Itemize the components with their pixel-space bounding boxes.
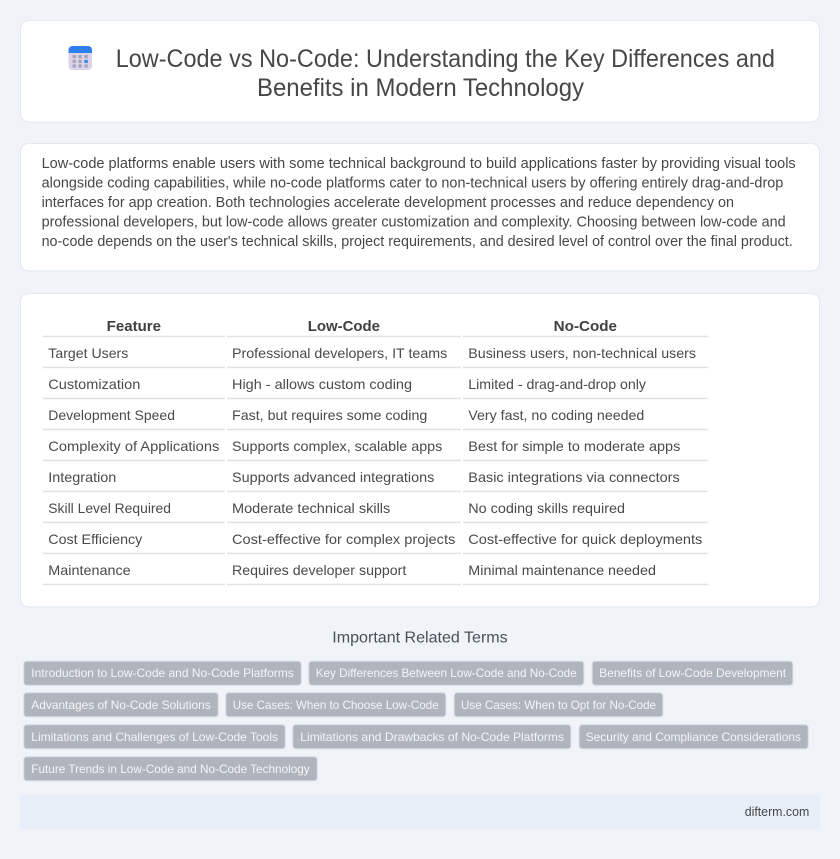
row: Maintenance: Maintenance	[48, 562, 131, 578]
row: Cost Efficiency: Cost-effective for quick deployments	[468, 531, 702, 547]
row: Target Users: Business users, non-technical users	[468, 345, 696, 361]
row: Skill Level Required: Skill Level Required	[48, 500, 171, 516]
tag: Use Cases No-Code: Use Cases: When to Opt for No-Code	[461, 698, 656, 712]
tag: Benefits: Benefits of Low-Code Development	[599, 666, 787, 680]
row: Development Speed: Very fast, no coding needed	[468, 407, 644, 423]
tag: Introduction: Introduction to Low-Code and No-Code Platforms	[31, 666, 294, 680]
row: Complexity of Applications: Best for simple to moderate apps	[468, 438, 680, 454]
table header row: Low-Code	[308, 318, 380, 335]
row: Customization	[43, 376, 708, 399]
tag: Use Cases Low-Code	[226, 693, 446, 717]
text block: introduction paragraph	[42, 156, 796, 250]
row: Cost Efficiency	[43, 531, 708, 554]
row: Integration	[43, 469, 708, 492]
tag: Key Differences	[309, 661, 584, 685]
row: Complexity of Applications	[43, 438, 708, 461]
row: Cost Efficiency: Cost Efficiency	[48, 531, 142, 547]
row: Customization: Limited - drag-and-drop only	[468, 376, 646, 392]
tag: Limitations Low-Code: Limitations and Challenges of Low-Code Tools	[31, 730, 278, 744]
row: Development Speed: Fast, but requires some coding	[232, 407, 427, 423]
icon: calendar	[68, 46, 92, 70]
tag: Advantages	[24, 693, 218, 717]
tag: Benefits	[592, 661, 793, 685]
heading: important related terms: Important Related Terms	[332, 630, 508, 647]
tag: Security	[579, 725, 808, 749]
row: Integration: Basic integrations via connectors	[468, 469, 680, 485]
table header row: Feature	[107, 318, 161, 335]
row: Maintenance: Requires developer support	[232, 562, 406, 578]
row: Skill Level Required: Moderate technical skills	[232, 500, 390, 516]
text block: introduction paragraph: interfaces for app creation. Both technologies accelerate development processes and reduce dependency on	[42, 195, 734, 211]
row: Cost Efficiency: Cost-effective for complex projects	[232, 531, 455, 547]
row: Complexity of Applications: Supports complex, scalable apps	[232, 438, 442, 454]
row: Target Users: Professional developers, IT teams	[232, 345, 447, 361]
row: Target Users: Target Users	[48, 345, 128, 361]
text block: introduction paragraph: Low-code platforms enable users with some technical background to build applications faster by providing visual tools	[42, 156, 796, 172]
tag: Use Cases No-Code	[454, 693, 663, 717]
tag: Security: Security and Compliance Considerations	[586, 730, 801, 744]
tag: Advantages: Advantages of No-Code Solutions	[31, 698, 211, 712]
panel: comparison table	[20, 294, 820, 607]
tag: Use Cases Low-Code: Use Cases: When to Choose Low-Code	[233, 698, 439, 712]
text block: introduction paragraph: alongside coding capabilities, while no-code platforms cater to non-technical users by offering entirely drag-and-drop	[42, 176, 783, 192]
text block: introduction paragraph: no-code depends on the user's technical skills, project requirements, and desired level of control over the final product.	[42, 234, 793, 250]
footer source text: difterm.com	[745, 804, 809, 819]
panel: header	[20, 20, 820, 122]
panel: introduction	[20, 144, 820, 271]
row: Skill Level Required: No coding skills required	[468, 500, 625, 516]
row: Maintenance: Minimal maintenance needed	[468, 562, 656, 578]
table header row: No-Code	[554, 318, 617, 335]
table header row	[43, 318, 708, 337]
text block: introduction paragraph: professional developers, but low-code allows greater customization and complexity. Choosing between low-code and	[42, 214, 786, 230]
row: Complexity of Applications: Complexity of Applications	[48, 438, 219, 454]
title	[116, 45, 775, 102]
tag: Introduction	[24, 661, 301, 685]
tag group: related terms	[24, 661, 808, 781]
row: Development Speed: Development Speed	[48, 407, 175, 423]
row: Development Speed	[43, 407, 708, 430]
title: Low-Code vs No-Code: Understanding the Key Differences and	[116, 45, 775, 73]
footer	[20, 795, 820, 829]
tag: Limitations Low-Code	[24, 725, 285, 749]
tag: Future Trends: Future Trends in Low-Code and No-Code Technology	[31, 762, 310, 776]
tag: Key Differences: Key Differences Between Low-Code and No-Code	[316, 666, 577, 680]
title: Benefits in Modern Technology	[257, 74, 584, 102]
row: Customization: High - allows custom coding	[232, 376, 412, 392]
row: Target Users	[43, 345, 708, 368]
tag: Limitations No-Code	[293, 725, 571, 749]
row: Integration: Supports advanced integrations	[232, 469, 434, 485]
tag: Limitations No-Code: Limitations and Drawbacks of No-Code Platforms	[300, 730, 564, 744]
tag: Future Trends	[24, 757, 317, 781]
row: Integration: Integration	[48, 469, 116, 485]
row: Maintenance	[43, 562, 708, 585]
row: Skill Level Required	[43, 500, 708, 523]
row: Customization: Customization	[48, 376, 140, 392]
